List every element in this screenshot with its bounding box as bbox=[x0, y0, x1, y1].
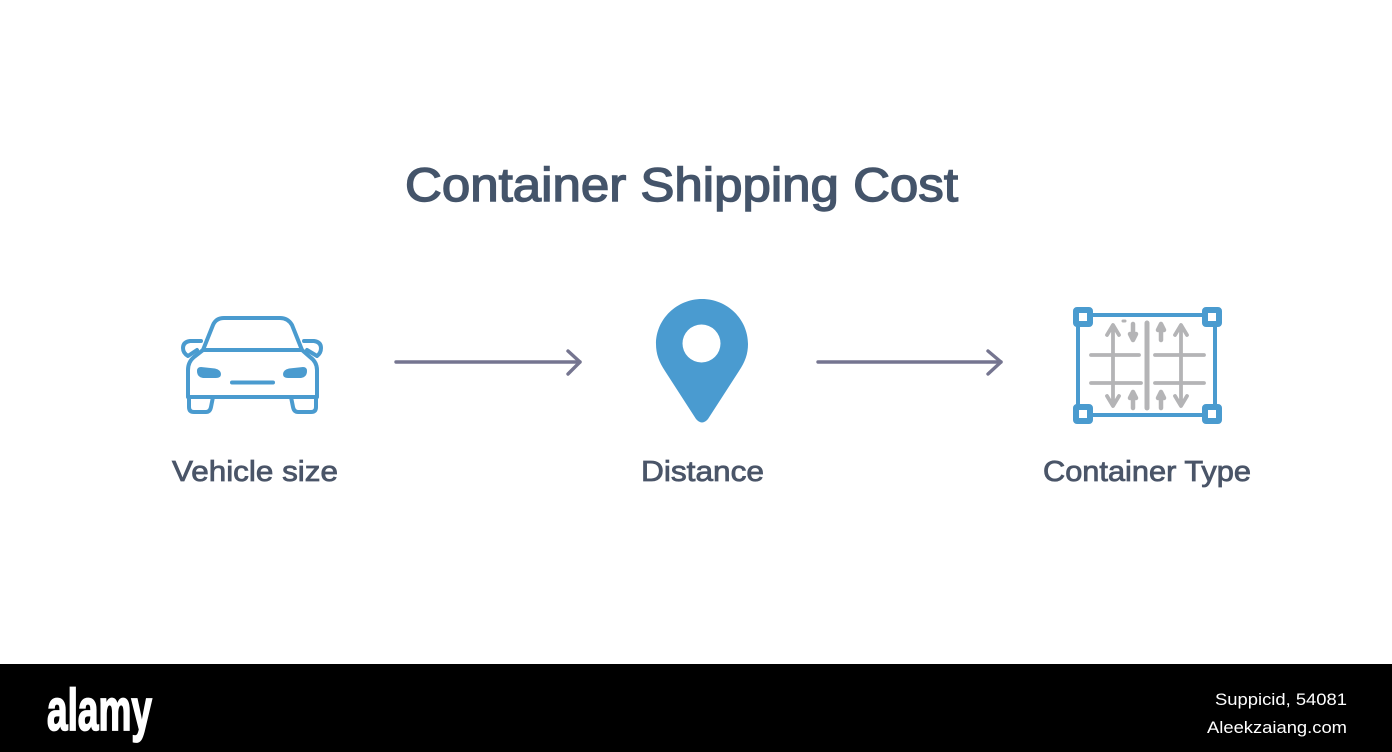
title: Container Shipping Cost bbox=[405, 158, 958, 211]
watermark details: Suppicid, 54081 bbox=[1215, 690, 1347, 709]
icon: location pin bbox=[656, 299, 748, 422]
arrow: distance to container type bbox=[818, 351, 1001, 374]
icon: container bbox=[1076, 310, 1219, 421]
label: vehicle size: Vehicle size bbox=[172, 456, 338, 488]
arrow: vehicle size to distance bbox=[396, 351, 580, 374]
watermark band bbox=[0, 664, 1392, 752]
watermark details bbox=[1207, 690, 1347, 737]
watermark details: Aleekzaiang.com bbox=[1207, 718, 1347, 737]
watermark logo: alamy bbox=[47, 678, 152, 743]
label: container type: Container Type bbox=[1043, 456, 1251, 488]
headlights bbox=[197, 367, 307, 378]
label: distance: Distance bbox=[641, 456, 764, 488]
icon: car bbox=[183, 318, 321, 412]
